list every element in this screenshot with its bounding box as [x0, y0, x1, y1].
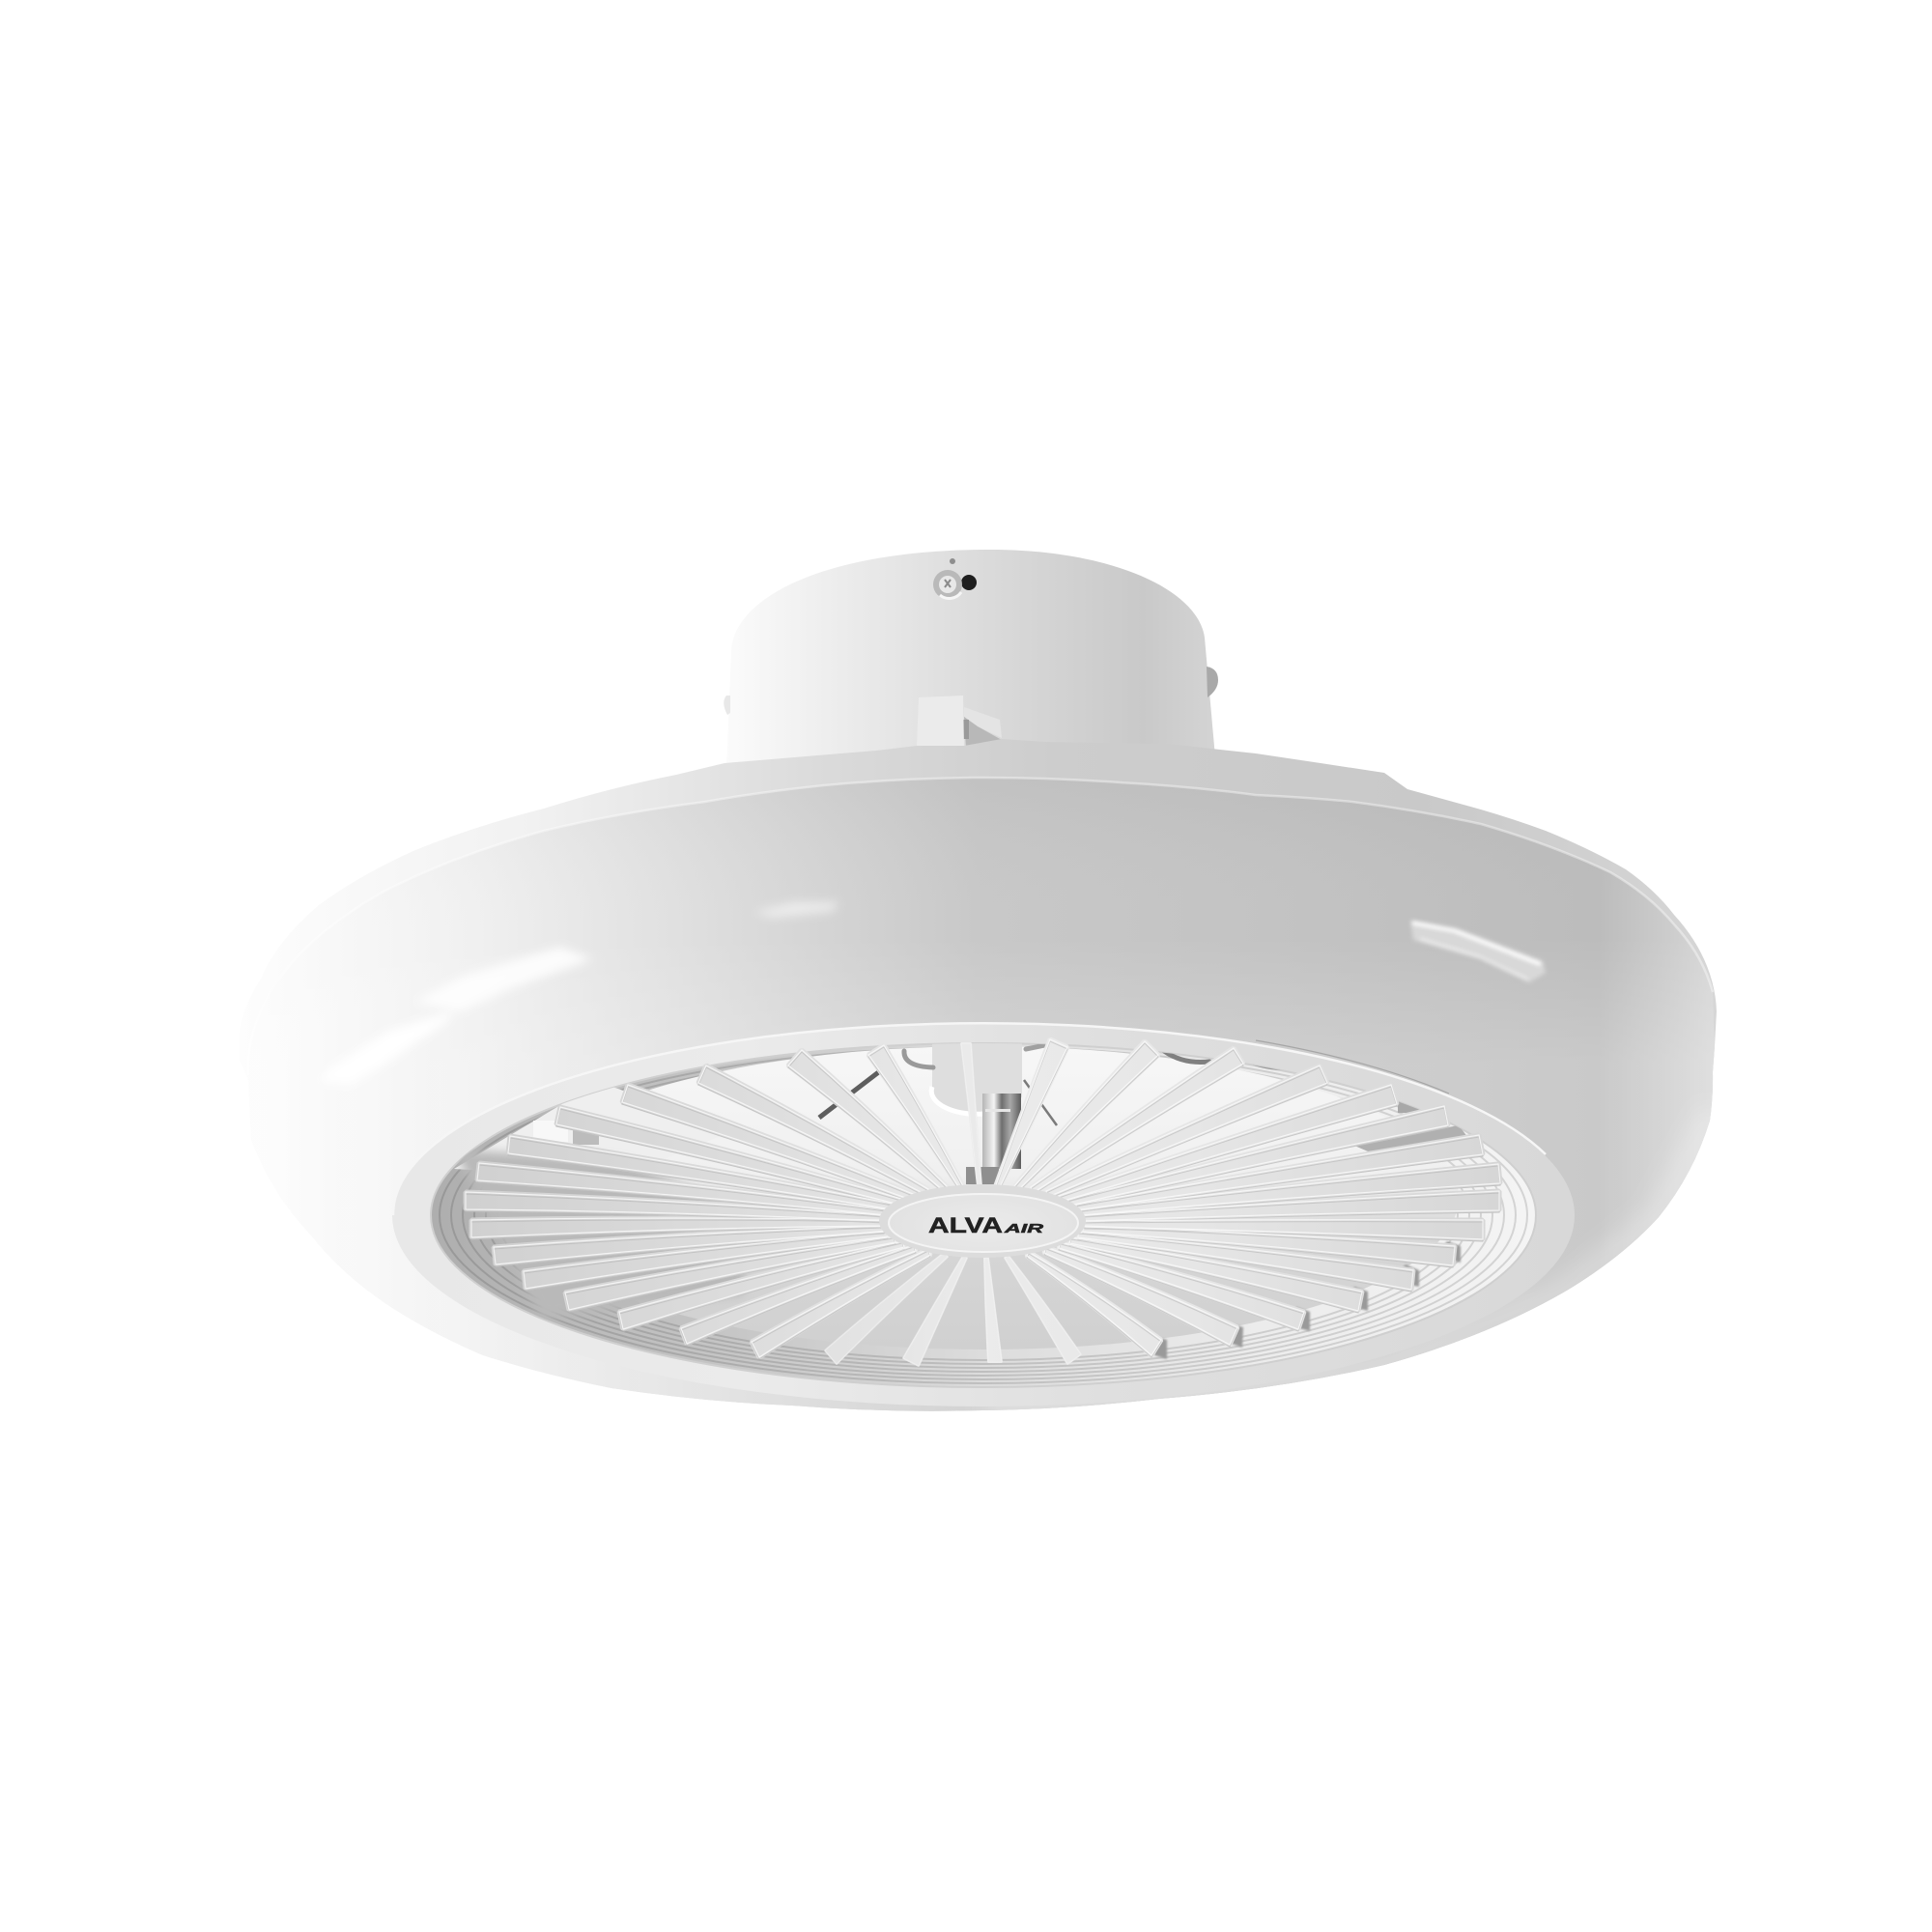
dark support rods — [819, 1070, 881, 1118]
centre gloss highlights — [753, 902, 838, 918]
logo text: ALVA AIR: ALVA — [928, 1213, 1003, 1237]
outer rim shell — [239, 739, 1717, 1411]
glossy main body — [248, 778, 1715, 1411]
blade tip shadows — [1150, 1241, 1461, 1359]
motor cylinder — [932, 1043, 1022, 1113]
product photo: ceiling fan — [338, 550, 1717, 1411]
icon: side screw — [1207, 667, 1218, 697]
inner cavity and motor mechanism — [454, 1043, 1468, 1350]
fan housing — [239, 739, 1717, 1411]
ceiling mount canopy — [724, 550, 1218, 768]
fan blades — [466, 1039, 1500, 1366]
chrome fittings — [904, 1043, 1290, 1068]
chrome rod — [982, 1094, 1021, 1169]
grille ring — [392, 1023, 1575, 1406]
icon: top screw — [933, 558, 977, 599]
stepped grille floor with concentric ribs — [431, 1043, 1536, 1387]
mounting clip — [917, 696, 1002, 749]
right gloss highlights — [1410, 921, 1546, 982]
centre hub with logo — [879, 1184, 1086, 1258]
logo text: ALVA AIR: AIR — [1003, 1221, 1044, 1236]
left gloss highlights — [319, 947, 592, 1085]
logo text: ALVA AIR — [928, 1213, 1044, 1237]
